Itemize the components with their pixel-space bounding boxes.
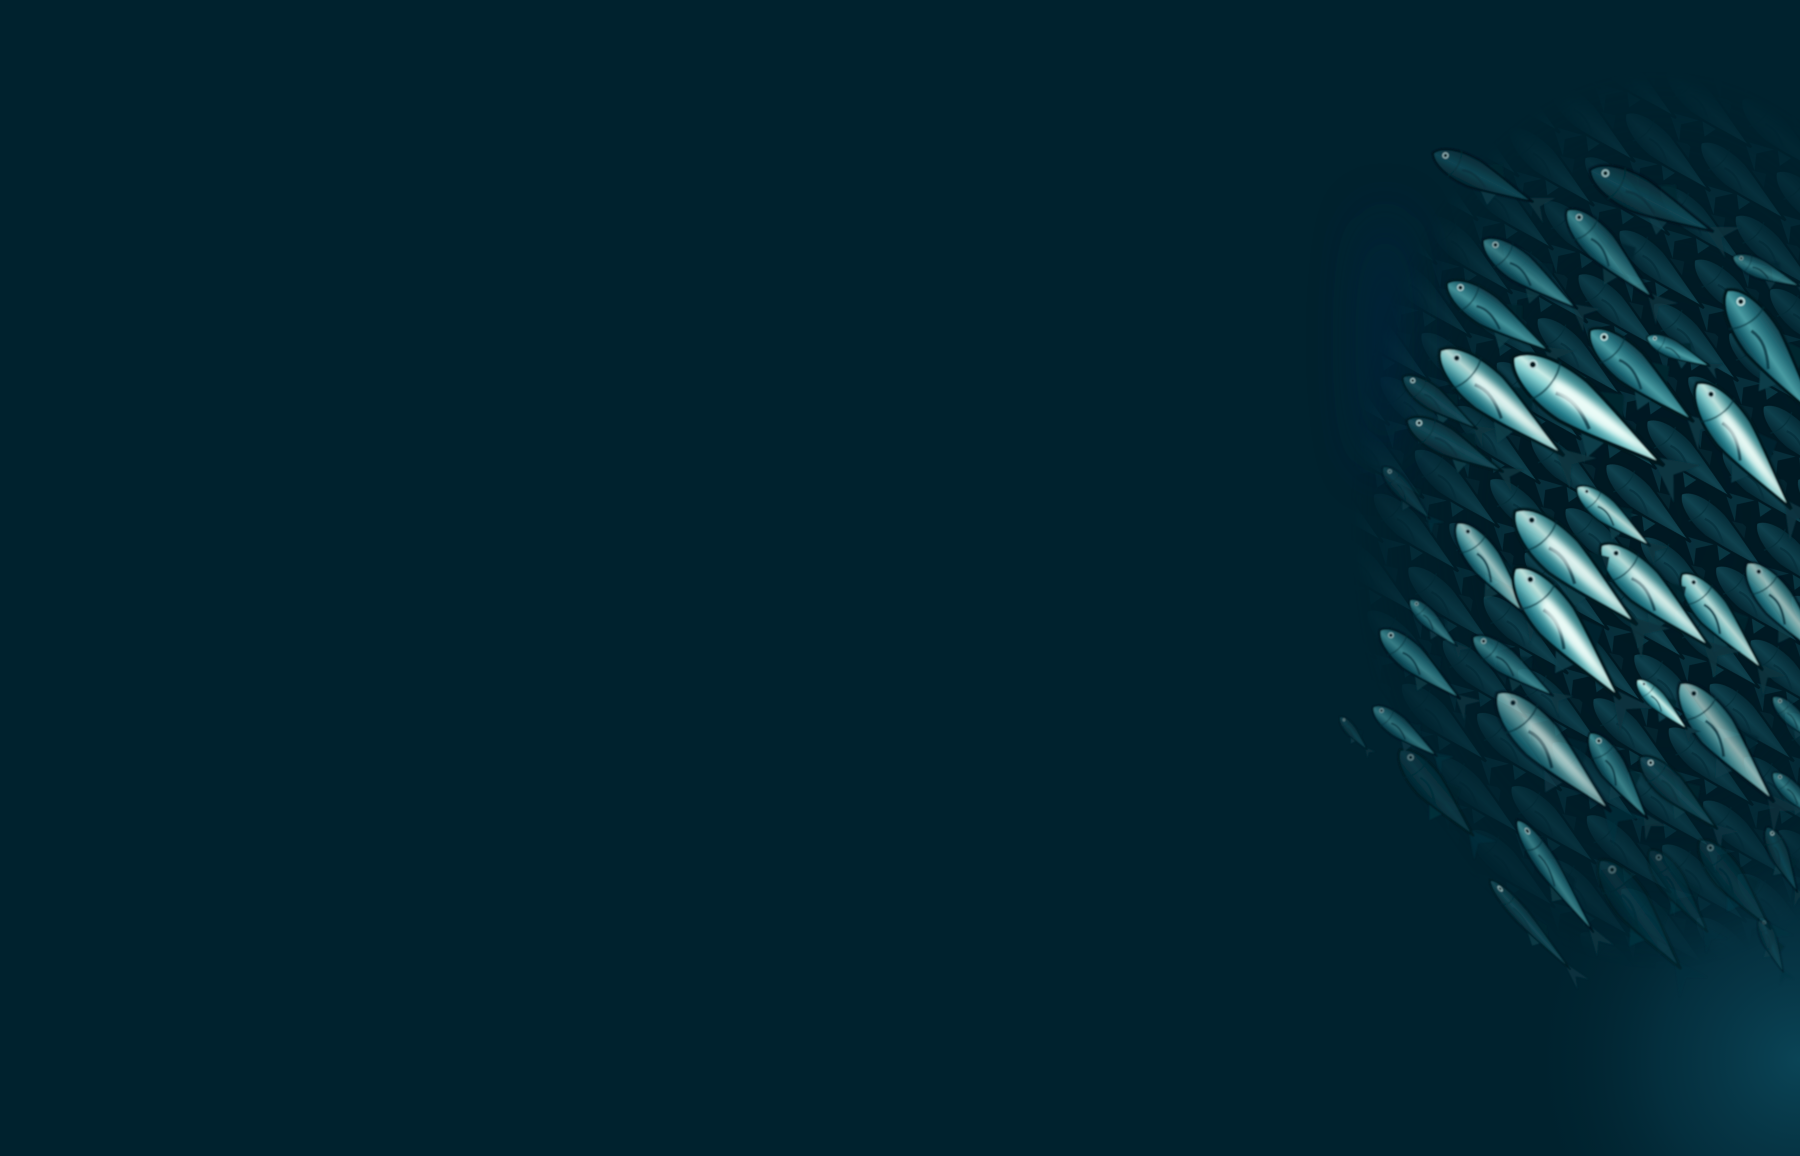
dim background fish [1333, 134, 1800, 1004]
mid-tone fish [1363, 194, 1800, 960]
navy haze left of the school [1367, 210, 1403, 470]
bright foreground fish [1419, 327, 1800, 855]
dense shoal texture behind the school [1388, 128, 1800, 898]
bottom right teal glow [1400, 760, 1800, 1156]
silver highlights on the brightest fish [1469, 371, 1785, 802]
fish school [1333, 134, 1800, 1004]
background: deep ocean with fish school [1340, 128, 1800, 1156]
